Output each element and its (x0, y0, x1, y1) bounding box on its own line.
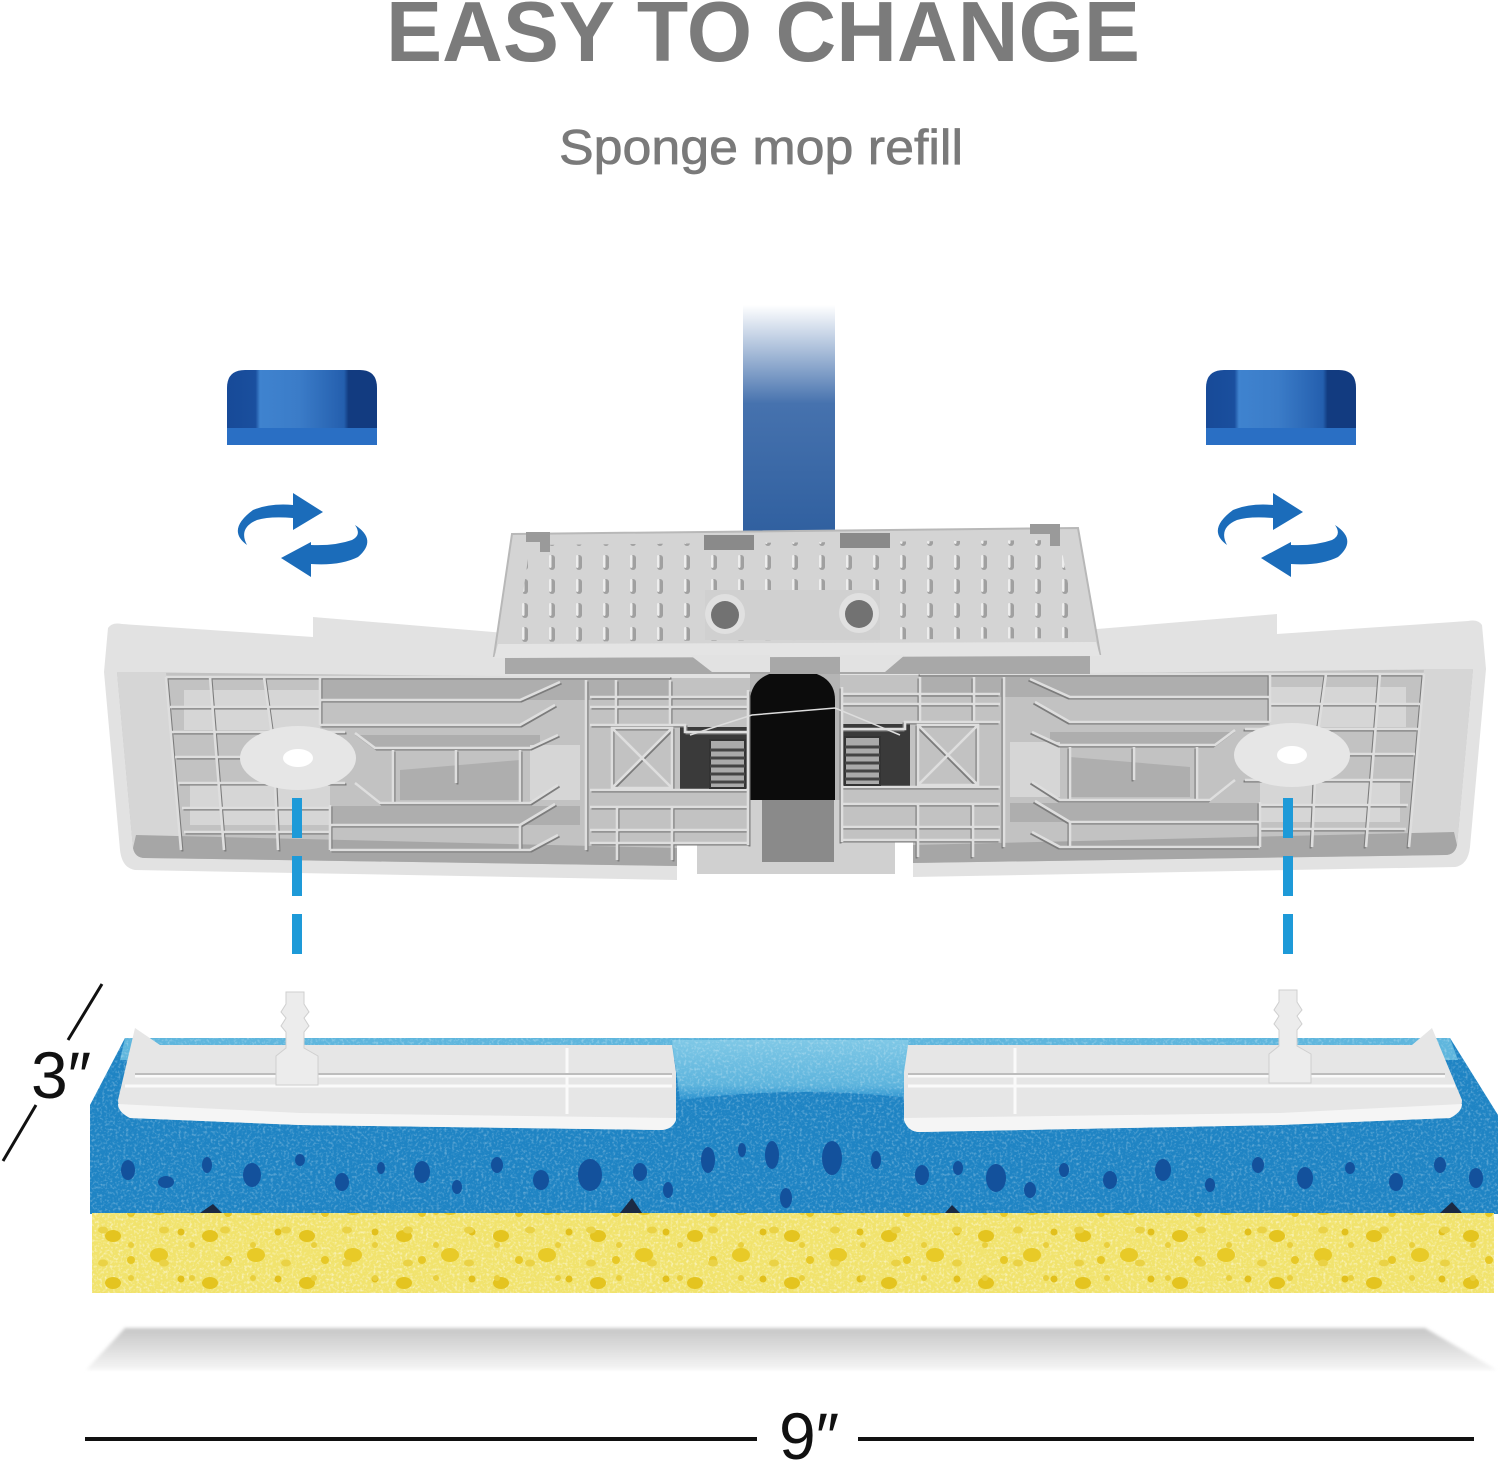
left dashed guide line (292, 798, 302, 956)
blue sponge layer (90, 1038, 1498, 1214)
left peg (276, 992, 318, 1085)
icon: right rotate arrows (1218, 493, 1347, 577)
right white plastic plate (904, 1028, 1462, 1132)
mop handle pole (743, 305, 835, 540)
right wing (840, 614, 1486, 877)
icon: right blue knob (1206, 370, 1356, 445)
ground shadow (86, 1328, 1497, 1370)
icon: left blue knob (227, 370, 377, 445)
icon: left rotate arrows (238, 493, 367, 577)
under-plate shadow strip (505, 656, 1090, 674)
mop head frame (104, 524, 1486, 880)
center bracket (500, 650, 1095, 874)
sponge refill (90, 990, 1498, 1293)
right dashed guide line (1283, 798, 1293, 956)
yellow sponge layer (92, 1213, 1494, 1293)
subtitle: Sponge mop refill (559, 121, 963, 175)
spring wire (690, 708, 900, 735)
depth dimension 3 inch: 3″ (31, 1038, 91, 1112)
depth dimension 3 inch (3, 984, 102, 1161)
right peg (1269, 990, 1311, 1083)
blue sponge pores (121, 1141, 1483, 1208)
left white plastic plate (118, 1028, 676, 1130)
spiked top plate (494, 524, 1100, 672)
left wing (104, 617, 750, 880)
